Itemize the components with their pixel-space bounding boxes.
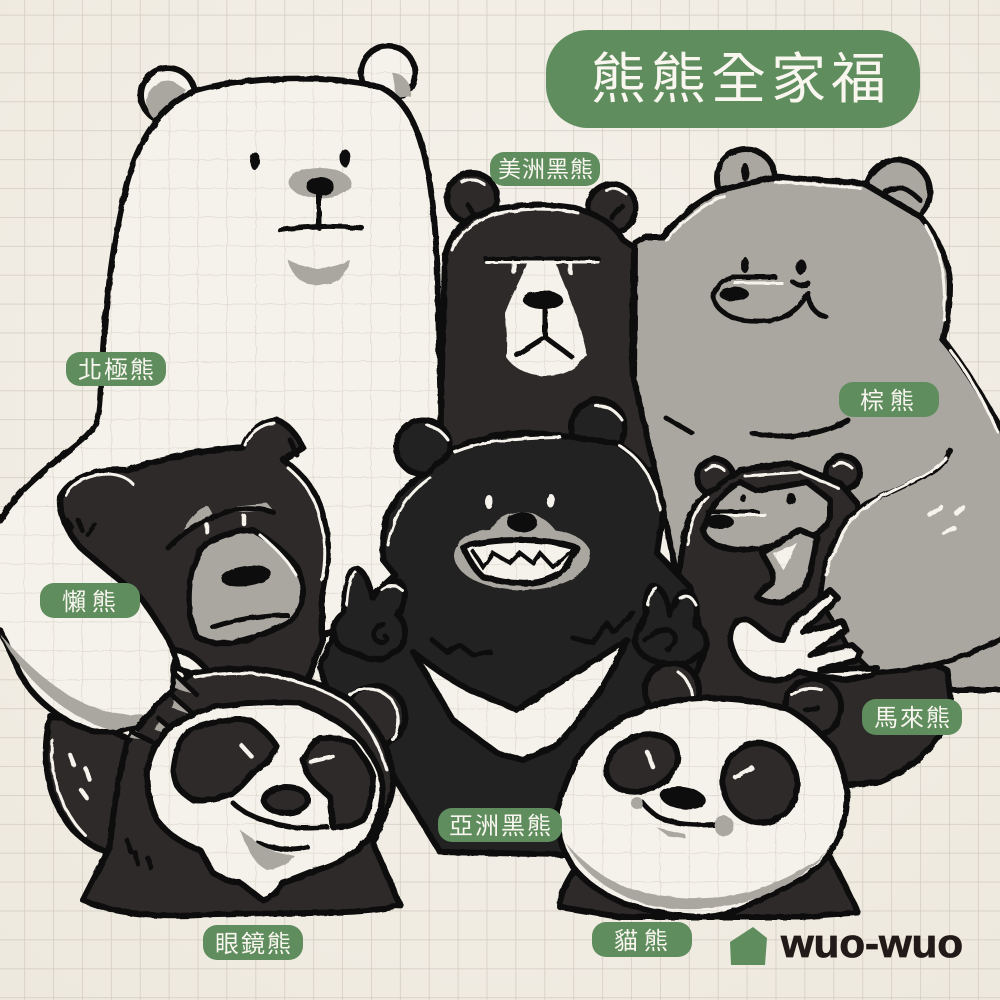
bear: sun bear	[670, 440, 1000, 785]
bear: American black bear	[440, 173, 656, 470]
rim	[452, 209, 578, 250]
label: 美洲黑熊: 美洲黑熊	[498, 156, 594, 182]
chest fur	[432, 613, 633, 655]
label: 懶熊: 懶熊	[62, 589, 122, 616]
label: 美洲黑熊	[490, 152, 600, 186]
bear: sloth bear	[60, 420, 328, 700]
label: 馬來熊: 馬來熊	[874, 705, 952, 732]
head and ears	[60, 420, 328, 700]
snout and face	[714, 257, 826, 321]
polar bear claws	[130, 675, 200, 742]
chest line	[666, 418, 848, 436]
fur ticks	[127, 840, 151, 868]
polar bear body	[0, 79, 442, 732]
nose and mouth	[233, 787, 327, 870]
body	[440, 205, 656, 470]
chest V	[413, 640, 627, 760]
ears	[396, 400, 625, 474]
face details	[168, 503, 296, 627]
label: 眼鏡熊: 眼鏡熊	[215, 931, 293, 958]
rim	[66, 423, 325, 580]
polar bear ears	[141, 46, 415, 122]
sloth bear lower body	[46, 717, 130, 852]
head	[703, 482, 830, 550]
icon: house	[730, 927, 767, 965]
nose and mouth	[631, 784, 734, 838]
label: 眼鏡熊	[203, 925, 303, 960]
bear: Asian black bear	[320, 400, 707, 855]
bear: spectacled bear	[83, 650, 405, 916]
ears	[645, 663, 841, 735]
ears	[447, 173, 636, 232]
right peace hand	[634, 586, 707, 664]
rim	[388, 437, 660, 545]
bear: brown bear	[634, 149, 1000, 690]
label: 亞洲黑熊: 亞洲黑熊	[449, 813, 553, 840]
polar bear face	[250, 149, 362, 285]
title badge	[546, 30, 920, 128]
chin shadow	[566, 843, 826, 909]
polar bear arm shadow	[0, 634, 155, 730]
body	[670, 463, 952, 785]
label: 棕熊	[839, 382, 939, 417]
ear claws	[67, 440, 297, 535]
label: 貓熊: 貓熊	[614, 928, 674, 955]
label: 亞洲黑熊	[438, 808, 562, 842]
face details	[706, 493, 796, 529]
ears	[173, 650, 405, 746]
bear: panda	[557, 663, 858, 917]
tongue and tooth	[757, 530, 817, 602]
body	[634, 177, 1000, 690]
brown bear arm	[820, 440, 1000, 673]
eye patches	[173, 719, 373, 827]
label: 北極熊	[66, 352, 166, 386]
label: 懶熊	[40, 583, 140, 618]
muzzle and teeth	[454, 494, 590, 590]
ears	[717, 149, 930, 224]
eye patches	[598, 724, 806, 831]
hood and body	[83, 669, 400, 916]
head	[557, 698, 847, 917]
paw and claws	[730, 590, 877, 681]
label: 馬來熊	[862, 699, 962, 735]
muzzle	[189, 530, 304, 643]
logo text: wuo-wuo	[780, 922, 963, 966]
logo	[730, 922, 963, 966]
title text: 熊熊全家福	[591, 48, 891, 110]
ears	[697, 456, 860, 495]
label: 棕熊: 棕熊	[860, 388, 920, 415]
body	[320, 433, 705, 855]
bear: polar bear	[0, 46, 442, 732]
face	[147, 703, 383, 900]
rim	[688, 472, 838, 545]
label: 貓熊	[592, 922, 692, 957]
face	[486, 259, 598, 376]
label: 北極熊: 北極熊	[78, 357, 156, 384]
left peace hand	[334, 569, 405, 659]
body	[560, 857, 858, 917]
rim	[195, 673, 387, 770]
rim	[666, 182, 998, 432]
